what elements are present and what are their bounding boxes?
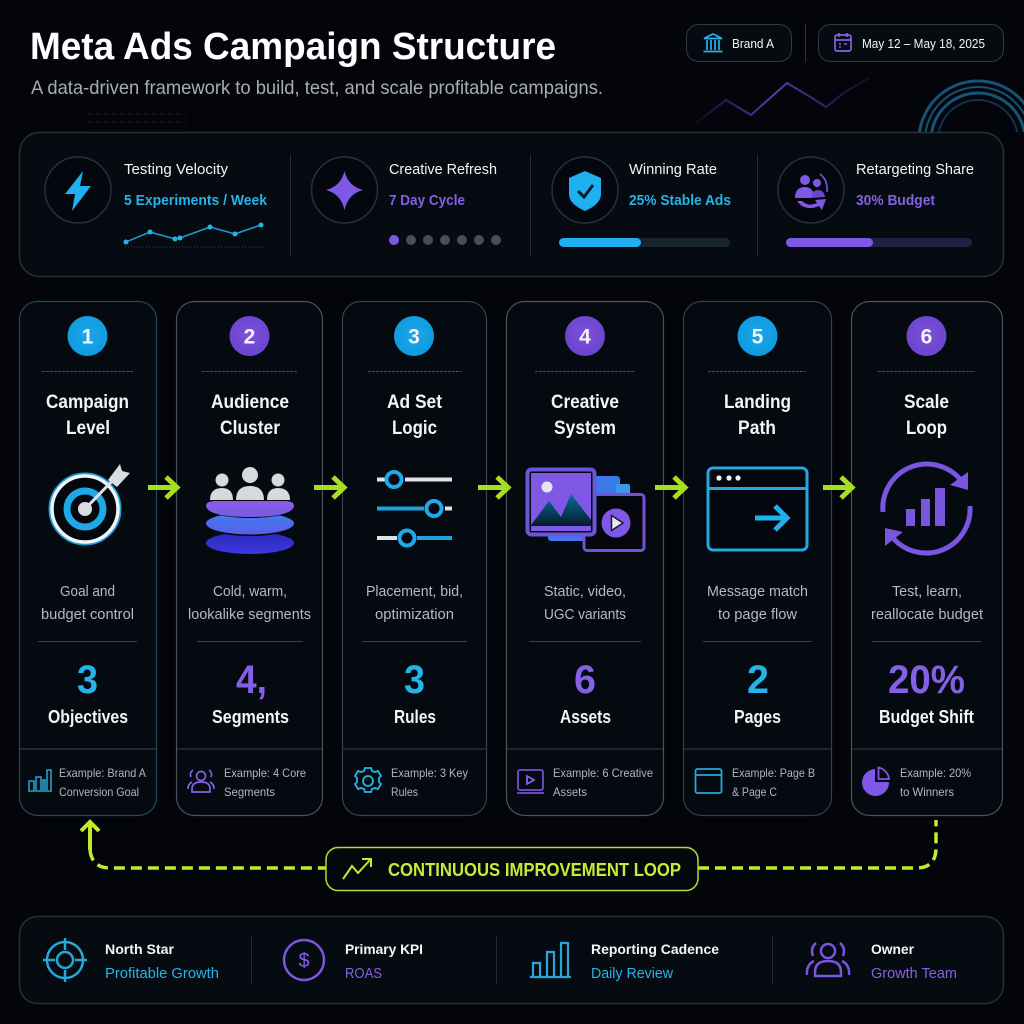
value: Profitable Growth <box>105 966 219 982</box>
example note <box>696 766 815 799</box>
value: 30% Budget <box>856 192 935 209</box>
arrow: step 1 to 2 <box>148 477 178 498</box>
description: optimization <box>375 607 454 623</box>
step number <box>394 316 434 356</box>
panel: card 1 campaign level <box>20 302 156 816</box>
example text: Rules <box>391 785 418 799</box>
step number <box>230 316 270 356</box>
metric label: Objectives <box>48 707 128 727</box>
description: Message match <box>707 584 808 600</box>
example note <box>28 766 146 799</box>
metric label: Rules <box>394 707 436 727</box>
panel: card 6 scale loop <box>852 302 1002 816</box>
metric value: 2 <box>747 658 769 702</box>
panel: card 2 audience cluster <box>176 302 322 816</box>
icon: trend up <box>343 859 371 879</box>
description: UGC variants <box>544 607 626 623</box>
description: Static, video, <box>544 584 626 600</box>
description: budget control <box>41 607 134 623</box>
value: 25% Stable Ads <box>629 192 731 209</box>
icon: pie chart <box>862 768 889 796</box>
description: Goal and <box>60 584 115 600</box>
sparkline <box>124 222 266 247</box>
heading: Scale <box>904 391 949 413</box>
brand label: Brand A <box>732 37 775 51</box>
metric value: 6 <box>574 658 596 702</box>
icon: four-point star <box>312 157 378 223</box>
metric value: 20% <box>888 658 965 702</box>
arrow: step 5 to 6 <box>823 477 853 498</box>
heading: Level <box>66 417 110 439</box>
heading: Landing <box>724 391 791 413</box>
arrow: return to campaign level <box>81 822 99 850</box>
date pill <box>818 24 1004 62</box>
value: 5 Experiments / Week <box>124 192 268 209</box>
arrow: step 2 to 3 <box>314 477 345 498</box>
brand pill <box>686 24 792 62</box>
progress bar <box>786 238 972 247</box>
icon: audience stack <box>205 467 295 554</box>
arrow: step 3 to 4 <box>478 477 509 498</box>
metric label: Pages <box>734 707 781 727</box>
icon: bank building <box>704 34 722 52</box>
heading: Creative <box>551 391 619 413</box>
step number <box>738 316 778 356</box>
panel: card 3 ad set logic <box>342 302 486 816</box>
metric value: 4, <box>236 658 267 702</box>
description: Cold, warm, <box>213 584 287 600</box>
step number <box>906 316 946 356</box>
summary: north star <box>43 938 219 982</box>
example text: Assets <box>553 785 587 799</box>
metric: retargeting share <box>778 157 974 247</box>
metric: testing velocity <box>45 157 268 247</box>
description: lookalike segments <box>188 607 311 623</box>
description: reallocate budget <box>871 607 983 623</box>
heading: Logic <box>392 417 437 439</box>
value: ROAS <box>345 966 382 982</box>
value: 7 Day Cycle <box>389 192 465 209</box>
heading: Loop <box>906 417 947 439</box>
example text: Example: 4 Core <box>224 766 306 780</box>
example text: & Page C <box>732 785 777 799</box>
panel: card 4 creative system <box>506 302 664 816</box>
label: Creative Refresh <box>389 162 497 178</box>
label: Retargeting Share <box>856 162 974 178</box>
arrow: step 4 to 5 <box>655 477 686 498</box>
example text: Example: Page B <box>732 766 815 780</box>
metric label: Assets <box>560 707 611 727</box>
icon: crosshair <box>43 938 87 982</box>
example note <box>517 766 653 799</box>
description: Test, learn, <box>892 584 962 600</box>
badge: continuous improvement loop <box>326 848 698 890</box>
description: to page flow <box>718 607 798 623</box>
icon: dollar coin: $ <box>298 950 310 972</box>
seven day dots <box>389 235 501 245</box>
icon: bars <box>530 943 571 977</box>
loop connector <box>81 820 936 868</box>
example note <box>188 766 306 799</box>
heading: System <box>554 417 616 439</box>
label: North Star <box>105 941 175 957</box>
icon: video screen <box>517 770 544 793</box>
metric value: 3 <box>404 658 425 702</box>
icon: growth loop <box>883 464 970 553</box>
example text: Example: 20% <box>900 766 971 780</box>
label: Primary KPI <box>345 941 423 957</box>
icon: calendar <box>835 33 851 51</box>
summary: reporting cadence <box>530 941 719 982</box>
value: Growth Team <box>871 966 957 982</box>
heading: Path <box>738 417 776 439</box>
metric: winning rate <box>552 157 731 247</box>
example text: Conversion Goal <box>59 785 139 799</box>
icon: target with arrow <box>50 464 130 544</box>
icon: sliders <box>377 472 452 546</box>
example text: to Winners <box>900 785 954 799</box>
icon: retargeting people <box>778 157 844 223</box>
label: Owner <box>871 941 915 957</box>
summary: owner <box>807 941 957 982</box>
summary: primary kpi <box>284 940 423 982</box>
panel: card 5 landing path <box>684 302 832 816</box>
panel: footer summary <box>20 916 1004 1004</box>
badge label: CONTINUOUS IMPROVEMENT LOOP <box>388 860 681 880</box>
icon: shield check <box>552 157 618 223</box>
icon: people <box>188 770 214 792</box>
heading: Audience <box>211 391 289 413</box>
example text: Example: 3 Key <box>391 766 468 780</box>
label: Testing Velocity <box>124 162 229 178</box>
metric value: 3 <box>77 658 98 702</box>
example text: Example: Brand A <box>59 766 146 780</box>
icon: lightning bolt <box>45 157 111 223</box>
metric label: Segments <box>212 707 289 727</box>
icon: bar chart <box>28 770 52 791</box>
icon: small browser <box>696 769 722 793</box>
title: Meta Ads Campaign Structure <box>30 26 556 68</box>
heading: Cluster <box>220 417 280 439</box>
step number <box>68 316 108 356</box>
heading: Ad Set <box>387 391 442 413</box>
progress bar <box>559 238 730 247</box>
example note <box>355 766 468 799</box>
icon: gear <box>355 768 381 792</box>
step number: 4 <box>579 326 591 348</box>
date label: May 12 – May 18, 2025 <box>862 37 985 51</box>
step number <box>565 316 605 356</box>
label: Reporting Cadence <box>591 941 719 957</box>
example note <box>862 766 971 799</box>
description: Placement, bid, <box>366 584 463 600</box>
step number: 6 <box>921 326 932 348</box>
label: Winning Rate <box>629 162 717 178</box>
heading: Campaign <box>46 391 129 413</box>
icon: team <box>807 943 849 976</box>
icon: browser window <box>708 468 807 550</box>
step number: 2 <box>244 326 255 348</box>
metric: creative refresh <box>312 157 501 245</box>
value: Daily Review <box>591 966 674 982</box>
step number: 5 <box>752 326 764 348</box>
step number: 3 <box>408 326 420 348</box>
subtitle: A data-driven framework to build, test, and scale profitable campaigns. <box>31 77 603 99</box>
step number: 1 <box>82 326 94 348</box>
panel: metrics strip <box>20 132 1004 276</box>
example text: Segments <box>224 785 275 799</box>
example text: Example: 6 Creative <box>553 766 653 780</box>
icon: creative assets <box>528 470 644 550</box>
metric label: Budget Shift <box>879 707 974 727</box>
